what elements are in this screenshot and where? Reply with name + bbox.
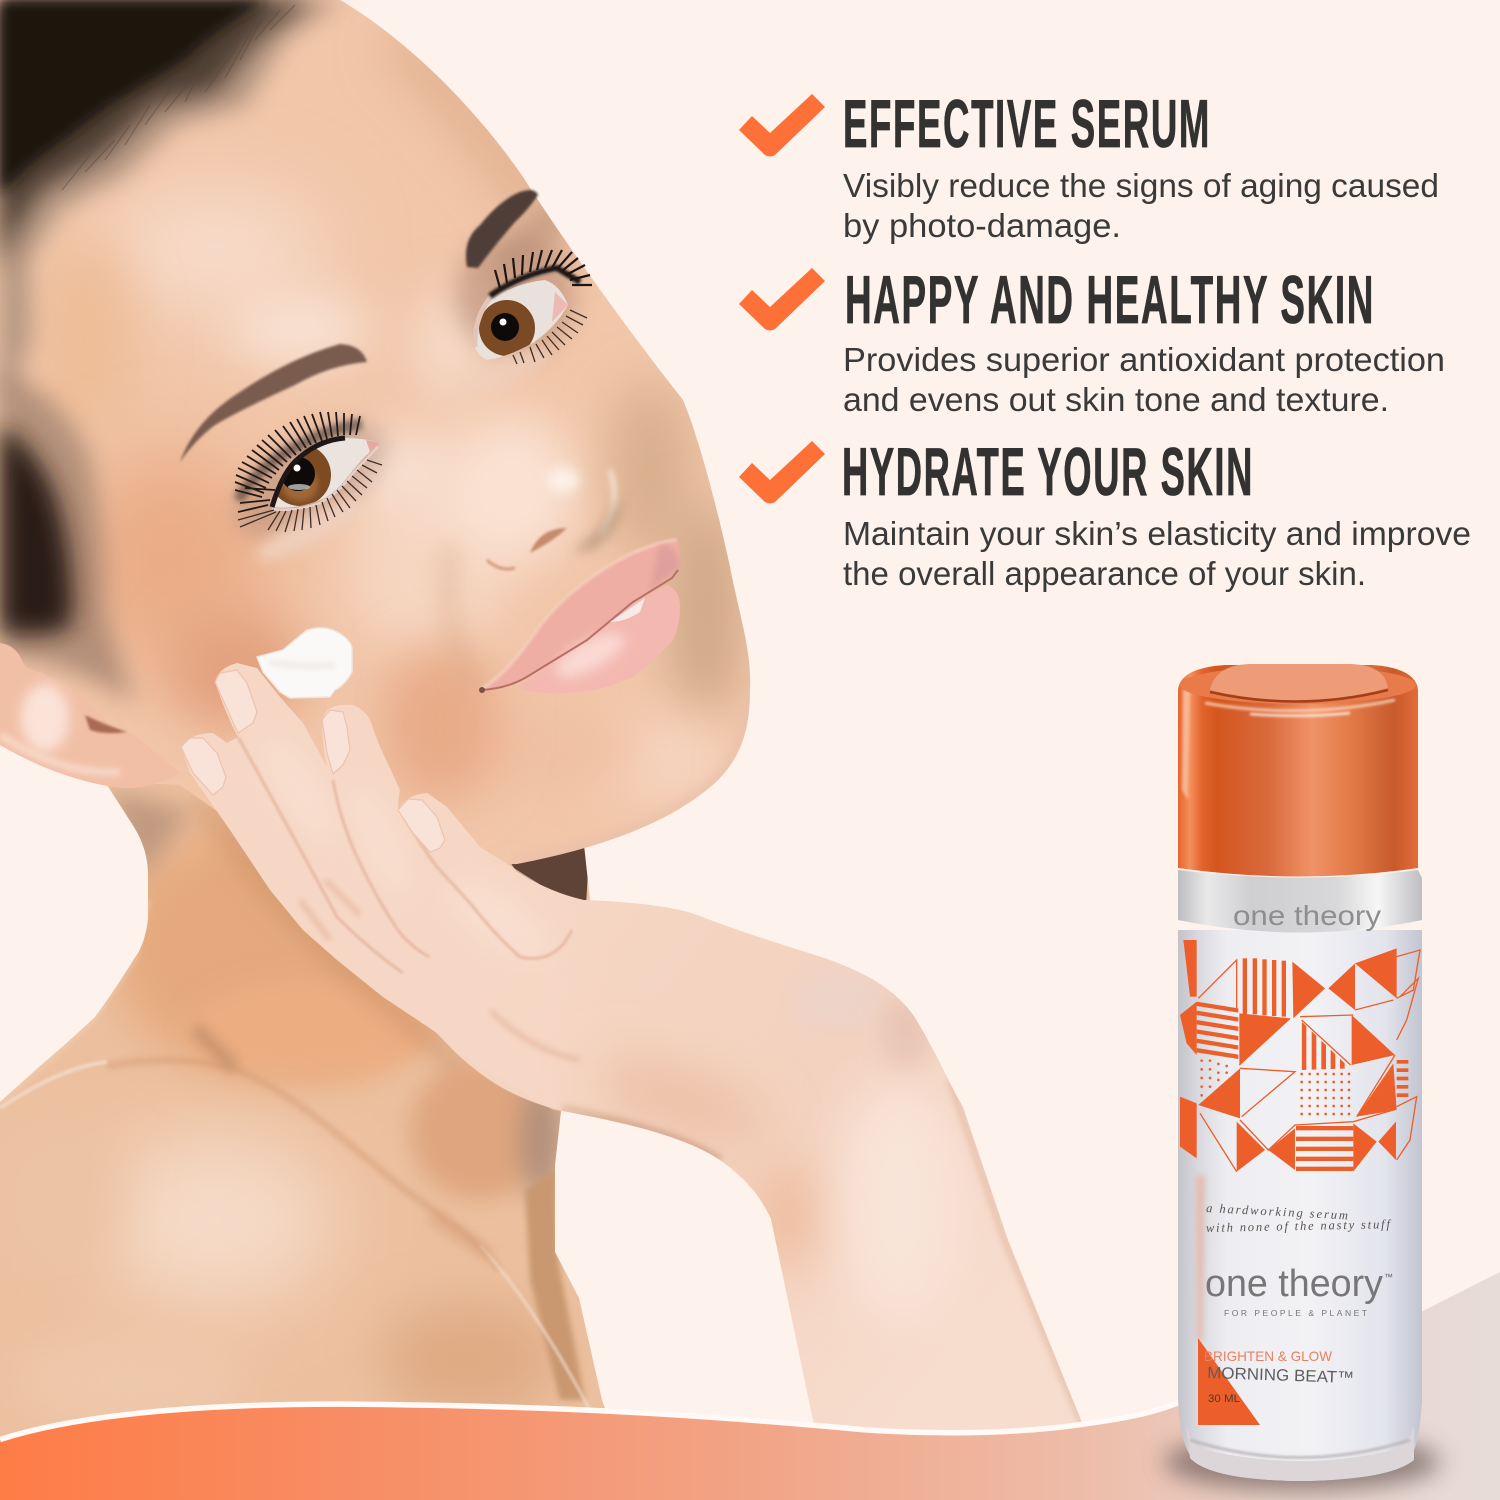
hair xyxy=(0,0,345,705)
silver collar xyxy=(1178,870,1422,932)
geometric label pattern xyxy=(1180,940,1420,1172)
product name: MORNING BEAT™ xyxy=(1207,1364,1354,1387)
variant label: BRIGHTEN & GLOW xyxy=(1204,1348,1333,1364)
face xyxy=(0,0,770,880)
text: hydrate your skin description: the overall appearance of your skin. xyxy=(843,555,1366,592)
text: happy and healthy skin description: and evens out skin tone and texture. xyxy=(843,381,1389,418)
text: happy and healthy skin description: Provides superior antioxidant protection xyxy=(843,341,1445,378)
arm and wrist xyxy=(436,868,1082,1430)
eyebrow: near side xyxy=(180,344,367,462)
volume: 30 ML xyxy=(1208,1393,1240,1405)
text: effective serum description: by photo-damage. xyxy=(843,207,1121,244)
checkmark 1 xyxy=(739,94,825,156)
text: effective serum description xyxy=(843,167,1439,244)
text: happy and healthy skin description xyxy=(843,341,1445,418)
product bottle xyxy=(1164,664,1440,1490)
nose xyxy=(487,467,619,569)
brand trademark: ™ xyxy=(1384,1272,1393,1282)
text: hydrate your skin description xyxy=(843,515,1471,592)
checkmark 3 xyxy=(739,441,825,504)
orange corner triangle xyxy=(1198,1338,1260,1425)
hand and fingers xyxy=(181,663,620,1119)
ear xyxy=(0,643,180,788)
bottom wave band xyxy=(0,1272,1500,1500)
nail: ring finger xyxy=(398,799,445,852)
nail: index finger xyxy=(215,670,257,733)
tagline xyxy=(1206,1201,1392,1235)
cap xyxy=(1178,665,1418,876)
tagline: with none of the nasty stuff xyxy=(1206,1217,1392,1235)
eyebrow: far side xyxy=(466,190,538,268)
cream dab xyxy=(257,628,352,698)
bottle body xyxy=(1178,930,1422,1481)
cap top disc xyxy=(1180,664,1416,711)
brand strapline: FOR PEOPLE & PLANET xyxy=(1224,1308,1367,1318)
tagline: a hardworking serum xyxy=(1206,1201,1348,1222)
brand logo text: one theory xyxy=(1205,1263,1383,1305)
nail: little finger xyxy=(181,738,226,795)
checkmark 2 xyxy=(739,268,825,330)
nail: middle finger xyxy=(322,710,350,774)
photo: woman applying cream xyxy=(0,0,1100,1460)
neck and shoulder xyxy=(0,784,605,1436)
eye: far side xyxy=(475,250,592,364)
bottle shadow xyxy=(1164,1434,1440,1490)
text: hydrate your skin description: Maintain your skin’s elasticity and improve xyxy=(843,515,1471,552)
eye: near side xyxy=(235,412,382,532)
collar brand text: one theory xyxy=(1233,900,1381,931)
lips xyxy=(479,540,680,693)
text: effective serum description: Visibly reduce the signs of aging caused xyxy=(843,167,1439,204)
